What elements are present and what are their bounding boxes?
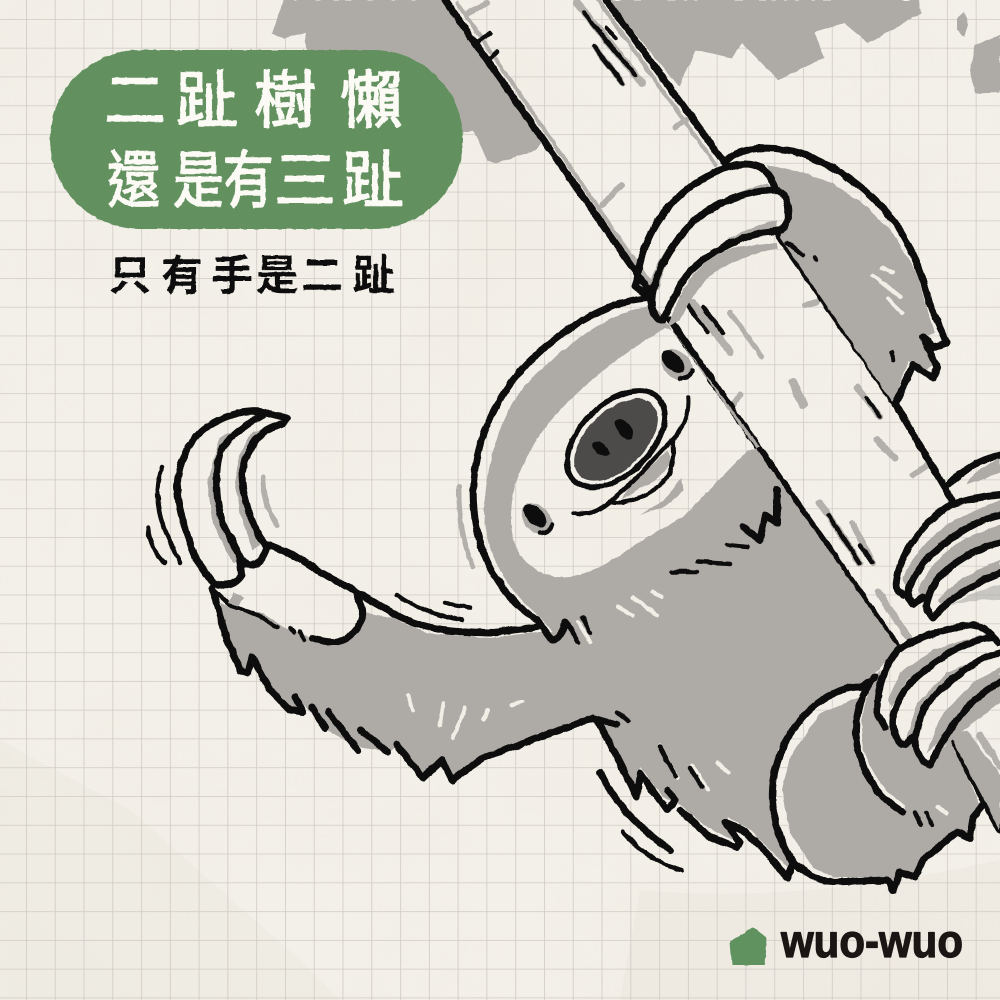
- mouth: [573, 397, 688, 514]
- icon: green house: [730, 927, 767, 965]
- title line two: 趾: [342, 147, 404, 216]
- belly highlights: [660, 746, 728, 790]
- motion lines by head: [459, 487, 473, 567]
- lower hand claws: [877, 625, 1000, 765]
- left eye: [515, 497, 559, 541]
- title line one: 二趾樹懶: [104, 67, 402, 136]
- brand wordmark: wuo-wuo: [780, 915, 963, 967]
- green pill background: [50, 50, 463, 229]
- background foliage silhouette: [272, 0, 1000, 163]
- title line two: [107, 147, 404, 216]
- raised claws: [148, 411, 287, 606]
- sloth head outline: [459, 298, 777, 642]
- upper right hand claws: [896, 455, 1000, 618]
- title line two: 有: [223, 147, 274, 216]
- body fur strokes at belly edge: [597, 712, 793, 878]
- title pill: [50, 50, 463, 229]
- claw outlines: [177, 411, 287, 585]
- belly motion lines: [600, 772, 670, 850]
- right eye: [655, 343, 699, 387]
- upper arm gripping the branch: [727, 148, 947, 405]
- reaching arm outline and hand: [212, 545, 617, 780]
- title line two: 三: [274, 147, 336, 216]
- lower leg and arm hugging the branch: [772, 670, 1000, 890]
- subtitle: 只有手是二趾: [109, 252, 395, 299]
- branch outlines: [445, 0, 650, 292]
- nose: [549, 373, 683, 505]
- branch ink marks: [477, 13, 978, 772]
- brand logo: [730, 915, 963, 967]
- tree branch: [445, 0, 1000, 830]
- chin fur strokes: [672, 545, 747, 572]
- claw motion lines: [148, 467, 180, 563]
- motion lines by arm: [397, 595, 470, 620]
- claw shading: [207, 423, 253, 563]
- upper paw claws: [635, 164, 789, 327]
- mouth shading: [622, 450, 684, 515]
- white fur marks on arm: [408, 695, 522, 738]
- title line two: 還: [107, 147, 160, 216]
- branch shading marks: [457, 0, 1000, 767]
- sloth body and head fur: [220, 306, 898, 870]
- title line two: 是: [173, 147, 224, 216]
